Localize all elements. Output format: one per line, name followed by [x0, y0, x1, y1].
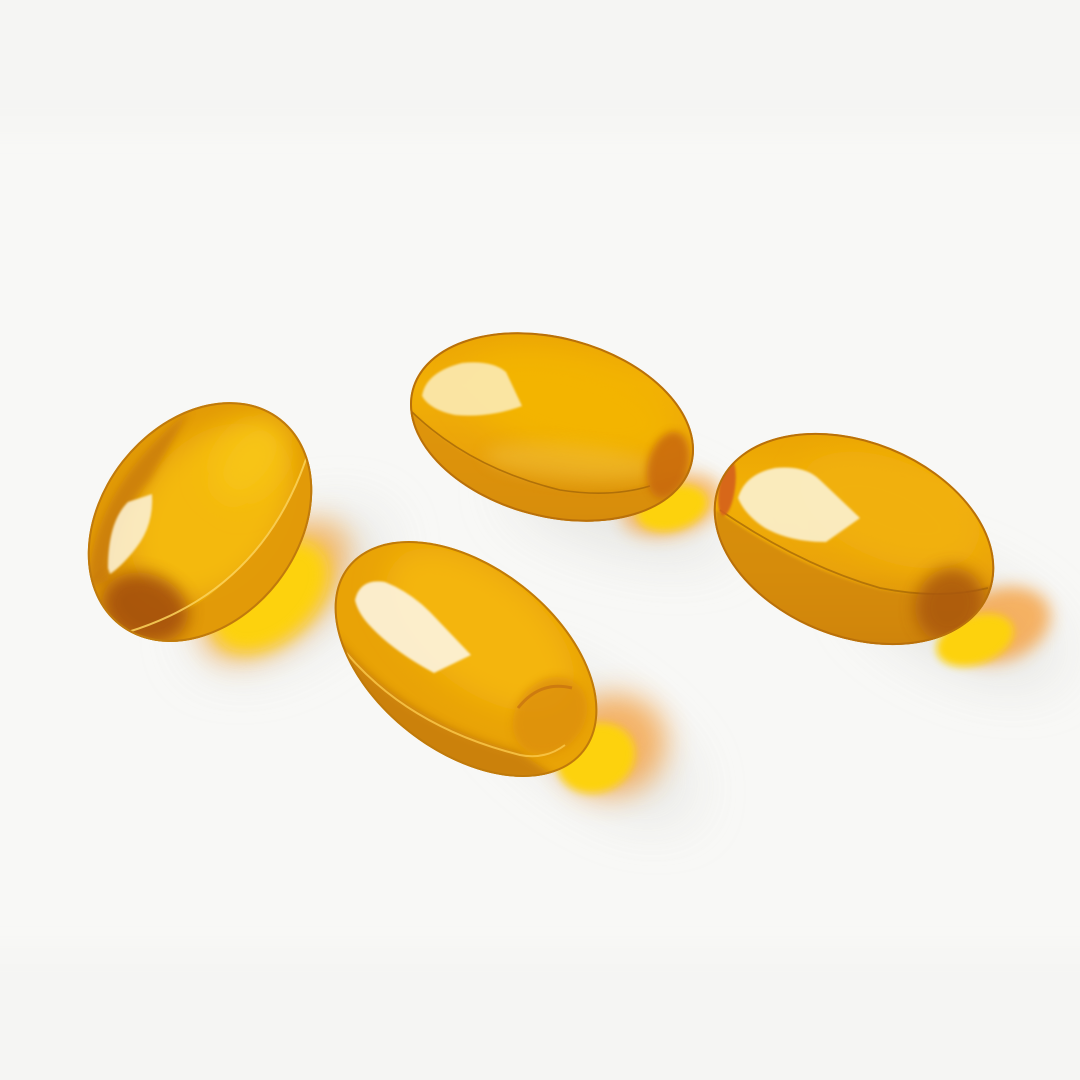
glow: top capsule caustic	[614, 463, 730, 547]
lower-right shell	[140, 458, 312, 642]
lower shell	[335, 635, 560, 780]
seam line	[336, 640, 565, 756]
seam line	[720, 510, 988, 594]
glow: bottom capsule caustic	[541, 676, 683, 814]
rim: left capsule	[43, 359, 357, 685]
lower shell	[716, 510, 992, 645]
photo: four amber softgel capsules on white surface	[88, 332, 1063, 820]
capsule: top	[410, 332, 694, 522]
soft grey shadows	[175, 451, 1072, 839]
dark amber end	[908, 558, 989, 640]
glow: right capsule caustic	[929, 573, 1061, 677]
rim: bottom capsule	[292, 495, 640, 823]
right end ring	[512, 674, 588, 754]
rim: top capsule	[390, 304, 714, 550]
seam line	[128, 450, 309, 632]
glow: left capsule caustic	[175, 493, 375, 687]
rim: right capsule	[683, 395, 1025, 683]
lower shell	[410, 413, 690, 522]
highlight	[108, 494, 152, 574]
seam line	[412, 412, 650, 493]
right end tint	[642, 428, 692, 500]
capsule: bottom	[334, 541, 598, 777]
highlight	[738, 468, 860, 542]
dark left rim	[88, 410, 190, 590]
highlight	[422, 362, 522, 416]
highlight	[355, 581, 471, 673]
dark amber end	[96, 563, 196, 642]
capsule: left	[88, 402, 312, 642]
left end accent	[717, 462, 737, 516]
capsule: right	[714, 433, 994, 645]
bright inner lens	[126, 418, 300, 606]
